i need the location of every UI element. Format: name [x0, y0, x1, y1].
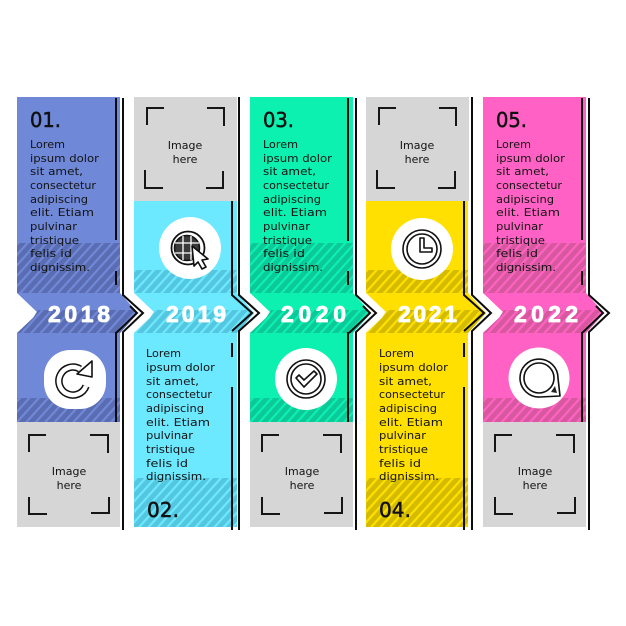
- year: 2022: [514, 301, 578, 327]
- hatch shading: [483, 243, 604, 422]
- outline strokes: [116, 98, 143, 530]
- body text: pulvinar: [30, 220, 77, 233]
- body text: sit amet,: [146, 375, 199, 388]
- body text: tristique: [30, 234, 79, 247]
- body text: consectetur: [263, 179, 329, 192]
- hatch shading: [134, 270, 254, 527]
- green ribbon: [250, 97, 371, 422]
- body text: adipiscing: [146, 402, 204, 415]
- year: 2020: [281, 301, 346, 327]
- body text: elit. Etiam: [30, 206, 94, 219]
- body text: dignissim.: [379, 470, 439, 483]
- yellow ribbon: [366, 201, 486, 527]
- body text: tristique: [379, 443, 428, 456]
- image placeholder: Image: [400, 139, 434, 152]
- body text: Lorem: [379, 347, 414, 360]
- body text: pulvinar: [496, 220, 543, 233]
- image placeholder: here: [57, 479, 82, 492]
- step number: 01.: [30, 108, 61, 132]
- body text: consectetur: [30, 179, 96, 192]
- body text: tristique: [263, 234, 312, 247]
- body text: pulvinar: [263, 220, 310, 233]
- body text: [146, 347, 215, 483]
- body text: Lorem: [30, 138, 65, 151]
- icon: check badge: [275, 348, 337, 410]
- body text: ipsum dolor: [146, 361, 215, 374]
- column 3: 2020: [250, 97, 376, 530]
- image placeholder: [250, 422, 353, 527]
- image placeholder: here: [173, 153, 198, 166]
- body text: felis id: [146, 457, 188, 470]
- year: 2021: [398, 301, 457, 327]
- icon: globe with cursor: [159, 217, 221, 279]
- body text: adipiscing: [496, 193, 554, 206]
- image placeholder: here: [405, 153, 430, 166]
- body text: adipiscing: [379, 402, 437, 415]
- image placeholder: Image: [52, 465, 86, 478]
- outline strokes: [348, 98, 376, 530]
- body text: tristique: [146, 443, 195, 456]
- body text: elit. Etiam: [146, 416, 210, 429]
- step number: 02.: [147, 498, 179, 522]
- year: 2019: [166, 301, 226, 327]
- body text: adipiscing: [263, 193, 321, 206]
- body text: elit. Etiam: [496, 206, 560, 219]
- body text: pulvinar: [146, 429, 193, 442]
- body text: ipsum dolor: [30, 152, 99, 165]
- body text: consectetur: [379, 388, 445, 401]
- image placeholder: [483, 422, 586, 527]
- column 2: 2019: [134, 97, 259, 530]
- body text: elit. Etiam: [263, 206, 327, 219]
- body text: sit amet,: [30, 165, 83, 178]
- body text: Lorem: [496, 138, 531, 151]
- image placeholder: [134, 97, 237, 201]
- image placeholder: Image: [285, 465, 319, 478]
- image placeholder: [366, 97, 469, 201]
- body text: ipsum dolor: [379, 361, 448, 374]
- body text: dignissim.: [146, 470, 206, 483]
- icon: refresh arrow: [44, 350, 106, 409]
- cyan ribbon: [134, 201, 254, 527]
- body text: ipsum dolor: [496, 152, 565, 165]
- column 1: 2018: [17, 97, 143, 530]
- icon: chat bubble: [508, 348, 570, 408]
- step number: 05.: [496, 108, 527, 132]
- body text: dignissim.: [30, 261, 90, 274]
- blue ribbon: [17, 97, 138, 422]
- step number: 03.: [263, 108, 294, 132]
- pink ribbon: [483, 97, 604, 422]
- body text: Lorem: [146, 347, 181, 360]
- image placeholder: here: [290, 479, 315, 492]
- body text: [496, 138, 565, 274]
- body text: ipsum dolor: [263, 152, 332, 165]
- hatch shading: [366, 270, 486, 527]
- hatch shading: [17, 243, 138, 422]
- body text: sit amet,: [496, 165, 549, 178]
- image placeholder: Image: [168, 139, 202, 152]
- column 5: 2022: [483, 97, 609, 530]
- body text: pulvinar: [379, 429, 426, 442]
- hatch shading: [250, 243, 371, 422]
- body text: sit amet,: [263, 165, 316, 178]
- image placeholder: here: [523, 479, 548, 492]
- icon: clock: [391, 218, 453, 280]
- body text: elit. Etiam: [379, 416, 443, 429]
- outline strokes: [232, 97, 259, 530]
- outline strokes: [582, 98, 609, 530]
- body text: sit amet,: [379, 375, 432, 388]
- body text: [30, 138, 99, 274]
- body text: consectetur: [146, 388, 212, 401]
- outline strokes: [464, 97, 491, 530]
- body text: [263, 138, 332, 274]
- step number: 04.: [379, 498, 411, 522]
- body text: felis id: [379, 457, 421, 470]
- year: 2018: [48, 301, 110, 327]
- body text: Lorem: [263, 138, 298, 151]
- image placeholder: [17, 422, 120, 527]
- body text: consectetur: [496, 179, 562, 192]
- body text: adipiscing: [30, 193, 88, 206]
- body text: felis id: [30, 247, 72, 260]
- body text: dignissim.: [496, 261, 556, 274]
- column 4: 2021: [366, 97, 491, 530]
- image placeholder: Image: [518, 465, 552, 478]
- body text: [379, 347, 448, 483]
- body text: felis id: [263, 247, 305, 260]
- body text: tristique: [496, 234, 545, 247]
- body text: dignissim.: [263, 261, 323, 274]
- body text: felis id: [496, 247, 538, 260]
